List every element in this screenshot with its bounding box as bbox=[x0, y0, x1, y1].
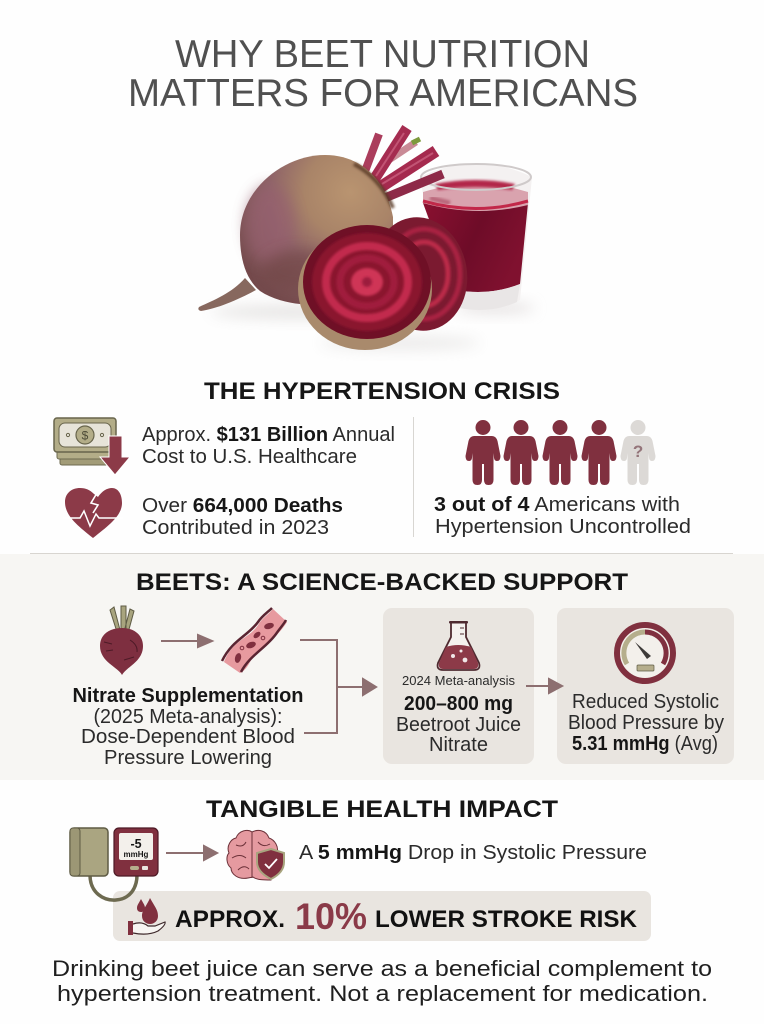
icon: broken heart with pulse bbox=[63, 488, 123, 538]
card: dosage bbox=[383, 608, 534, 764]
callout: stroke risk pill: APPROX. bbox=[175, 906, 285, 933]
beet stems bbox=[361, 128, 443, 200]
icon: pressure gauge bbox=[617, 625, 673, 681]
arrow: beet to vessel bbox=[161, 635, 212, 647]
closing note: hypertension treatment. Not a replacement for medication. bbox=[57, 981, 708, 1006]
text: nitrate supplementation bbox=[72, 685, 304, 769]
text: nitrate supplementation: Dose-Dependent Blood bbox=[81, 726, 295, 748]
icon: beet bbox=[100, 606, 143, 675]
title: WHY BEET NUTRITION bbox=[175, 33, 590, 76]
glass of beet juice bbox=[420, 164, 532, 310]
icon: four people and one unknown person bbox=[466, 420, 656, 485]
icon: hand with blood drops bbox=[128, 898, 165, 935]
title: MATTERS FOR AMERICANS bbox=[128, 72, 638, 115]
card: dosage: Beetroot Juice bbox=[396, 714, 521, 736]
icon: flask bbox=[438, 621, 479, 670]
icon: money with down arrow: $ bbox=[82, 428, 89, 442]
closing note: Drinking beet juice can serve as a beneficial complement to bbox=[52, 956, 712, 981]
card: outcome: 5.31 mmHg (Avg) bbox=[572, 733, 718, 755]
text: deaths: Contributed in 2023 bbox=[142, 517, 329, 539]
text: deaths bbox=[142, 495, 343, 539]
arrow: monitor to brain bbox=[166, 846, 217, 860]
text: uncontrolled hypertension: Hypertension Uncontrolled bbox=[435, 516, 691, 538]
arrow: bracket to dosage card bbox=[300, 640, 376, 733]
heading: beets science-backed support: BEETS: A SCIENCE-BACKED SUPPORT bbox=[136, 569, 628, 596]
text: uncontrolled hypertension bbox=[434, 494, 691, 538]
callout: stroke risk pill: 10% bbox=[295, 896, 367, 937]
callout: stroke risk pill: LOWER STROKE RISK bbox=[375, 906, 638, 933]
icon: blood vessel bbox=[222, 608, 287, 673]
rear beet slice bbox=[364, 210, 476, 338]
text: nitrate supplementation: (2025 Meta-analysis): bbox=[94, 706, 282, 728]
card: dosage: 2024 Meta-analysis bbox=[402, 673, 515, 688]
arrow: dosage to outcome bbox=[526, 679, 562, 693]
icon: four people and one unknown person: ? bbox=[633, 442, 643, 461]
hero photo: beet, slices and juice bbox=[198, 128, 535, 350]
text: healthcare cost: Approx. $131 Billion Annual bbox=[142, 424, 395, 446]
front beet slice bbox=[298, 225, 432, 350]
text: uncontrolled hypertension: 3 out of 4 Americans with bbox=[434, 494, 680, 516]
text: nitrate supplementation: Pressure Lowering bbox=[104, 747, 272, 769]
icon: blood pressure monitor: -5 bbox=[130, 837, 142, 851]
text: deaths: Over 664,000 Deaths bbox=[142, 495, 343, 517]
text: healthcare cost: Cost to U.S. Healthcare bbox=[142, 446, 357, 468]
whole beet bbox=[198, 155, 393, 311]
text: nitrate supplementation: Nitrate Supplementation bbox=[72, 685, 304, 707]
heading: tangible health impact: TANGIBLE HEALTH IMPACT bbox=[206, 796, 558, 823]
closing note bbox=[52, 956, 712, 1006]
card: dosage: 200–800 mg bbox=[404, 693, 513, 715]
title bbox=[128, 33, 638, 115]
icon: brain with shield bbox=[227, 830, 284, 880]
icon: money with down arrow bbox=[54, 418, 130, 475]
heading: the hypertension crisis: THE HYPERTENSION CRISIS bbox=[204, 378, 560, 405]
icon: blood pressure monitor: mmHg bbox=[124, 850, 149, 859]
card: outcome: Reduced Systolic bbox=[572, 691, 719, 713]
panel: science-backed support bbox=[0, 553, 764, 780]
card: outcome: Blood Pressure by bbox=[568, 712, 724, 734]
text: five mmHg drop: A 5 mmHg Drop in Systolic Pressure bbox=[299, 842, 647, 864]
text: healthcare cost bbox=[142, 424, 395, 468]
card: outcome bbox=[557, 608, 734, 764]
icon: blood pressure monitor bbox=[70, 828, 158, 900]
card: dosage: Nitrate bbox=[429, 734, 488, 756]
callout: stroke risk pill bbox=[113, 891, 651, 941]
